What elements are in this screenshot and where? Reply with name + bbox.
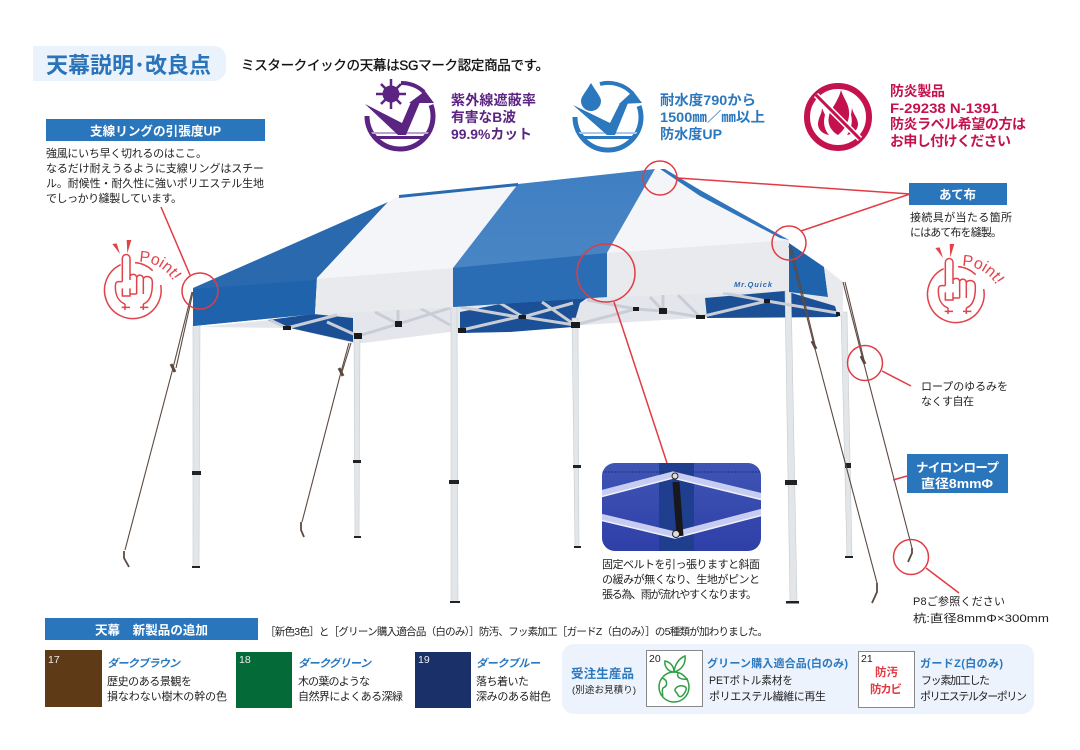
swatch 19 dark blue: 19 — [418, 654, 430, 666]
product 21 icon: antifouling — [858, 652, 914, 708]
ring: fixing belt — [577, 244, 667, 463]
label: stake: 杭:直径8mmΦ×300mm — [913, 612, 1049, 625]
callout: guy ring: でしっかり縫製しています。 — [46, 191, 182, 205]
UV text: 99.9%カット — [451, 126, 532, 142]
ring: stake — [894, 540, 959, 593]
icon: point hand right — [926, 244, 1004, 324]
swatch 17 dark brown — [45, 650, 227, 707]
photo caption: 固定ベルトを引っ張りますと斜面 — [602, 557, 760, 571]
label: rope tensioner: ロープのゆるみを — [921, 380, 1008, 393]
swatch 18 dark green: 18 — [239, 654, 251, 666]
icon: UV protection — [365, 79, 435, 149]
product 20 icon: green globe: 20 — [649, 653, 661, 665]
section heading: new products — [45, 618, 258, 640]
title — [33, 46, 226, 81]
subtitle: ミスタークイックの天幕はSGマーク認定商品です。 — [241, 58, 549, 73]
tent — [124, 169, 912, 604]
product 20 text: ポリエステル繊維に再生 — [709, 689, 826, 703]
flame retardant text — [890, 83, 1026, 149]
callout: corner patch: にはあて布を縫製。 — [910, 225, 1002, 239]
callout: guy ring — [46, 119, 265, 205]
label: rope tensioner — [921, 380, 1008, 408]
callout: nylon rope — [893, 454, 1008, 493]
swatch 19 dark blue — [415, 652, 551, 708]
callout: nylon rope: ナイロンロープ — [916, 461, 999, 475]
label: rope tensioner: なくす自在 — [921, 395, 974, 408]
canopy: right blue edge — [660, 169, 789, 240]
flame retardant text: 防炎製品 — [890, 83, 945, 99]
callout: guy ring: 支線リングの引張度UP — [90, 124, 221, 138]
title: 天幕説明･改良点 — [46, 53, 211, 78]
ring: rope tensioner — [848, 346, 911, 386]
swatch 17 dark brown: 損なわない樹木の幹の色 — [107, 689, 227, 703]
photo caption — [602, 557, 760, 601]
photo caption: の緩みが無くなり、生地がピンと — [602, 572, 760, 586]
icon: point hand left: Point! — [140, 250, 182, 280]
product 21 text: ポリエステルターポリン — [920, 690, 1027, 703]
leg clamps and feet — [192, 460, 853, 604]
product 21 text: ガードZ(白のみ) — [920, 656, 1003, 670]
panel: made to order — [562, 644, 1034, 714]
callout: corner patch: 接続具が当たる箇所 — [910, 210, 1012, 224]
swatch 19 dark blue: 深みのある紺色 — [476, 690, 551, 703]
water resistance text: 耐水度790から — [660, 92, 756, 108]
label: stake — [913, 594, 1049, 625]
UV text: 有害なB波 — [451, 109, 516, 125]
canopy: white right panel — [607, 169, 789, 297]
callout: guy ring: なるだけ耐えうるように支線リングはスチー — [46, 161, 264, 175]
UV text: 紫外線遮蔽率 — [451, 92, 536, 108]
canopy: white panel — [315, 184, 518, 314]
swatch 17 dark brown: 17 — [48, 654, 60, 666]
swatch 19 dark blue: 落ち着いた — [476, 674, 529, 688]
swatch 17 dark brown: 歴史のある景観を — [107, 674, 192, 688]
callout: guy ring: 強風にいち早く切れるのはここ。 — [46, 147, 207, 160]
frame struts — [270, 293, 838, 336]
flame retardant text: お申し付けください — [890, 133, 1011, 149]
callout: corner patch: あて布 — [939, 187, 976, 202]
flame retardant text: 防炎ラベル希望の方は — [890, 116, 1026, 132]
callout: guy ring: ル。耐候性・耐久性に強いポリエステル生地 — [46, 176, 264, 190]
swatch 19 dark blue: ダークブルー — [476, 657, 541, 670]
callout: nylon rope: 直径8mmΦ — [921, 476, 993, 491]
underside fabric — [200, 285, 843, 343]
product 20 text: PETボトル素材を — [709, 673, 793, 687]
product 20 text — [707, 656, 848, 703]
swatch 17 dark brown: ダークブラウン — [107, 657, 181, 670]
product 21 text: フッ素加工した — [921, 674, 990, 687]
product 20 icon: green globe — [646, 650, 702, 706]
logo: Mr.Quick — [734, 280, 773, 289]
canopy: left blue panel — [193, 202, 388, 326]
water resistance text: 1500㎜／㎜以上 — [660, 109, 765, 125]
guy ropes — [124, 246, 912, 603]
canopy: blue centre panel — [453, 169, 655, 307]
ring: corner patch at apex — [643, 161, 910, 195]
new products description: ［新色3色］と［グリーン購入適合品（白のみ）］防汚、フッ素加工［ガードZ（白のみ）］の5種類が加わりました。 — [265, 625, 768, 638]
label: stake: P8ご参照ください — [913, 594, 1005, 608]
swatch 18 dark green: 木の葉のような — [298, 674, 370, 688]
icon: point hand left — [104, 240, 182, 320]
water resistance text: 防水度UP — [660, 126, 722, 142]
UV text — [451, 92, 536, 142]
swatch 18 dark green: 自然界によくある深緑 — [298, 689, 403, 703]
flame retardant text: F-29238 N-1391 — [890, 100, 999, 116]
product 21 icon: antifouling: 防汚 — [875, 665, 898, 679]
made to order heading — [571, 666, 636, 696]
section heading: new products: 天幕 新製品の追加 — [95, 622, 208, 638]
icon: water resistance — [573, 83, 643, 150]
made to order heading: (別途お見積り) — [572, 684, 636, 696]
photo: fixing belt — [600, 463, 763, 551]
icon: point hand right: Point! — [963, 254, 1004, 284]
water resistance text — [660, 92, 765, 142]
ring: guy ring — [161, 207, 218, 309]
product 21 icon: antifouling: 防カビ — [870, 682, 902, 696]
product 21 text — [920, 656, 1027, 703]
swatch 18 dark green — [236, 652, 403, 708]
product 20 text: グリーン購入適合品(白のみ) — [707, 656, 848, 670]
swatch 18 dark green: ダークグリーン — [298, 657, 372, 670]
product 21 icon: antifouling: 21 — [861, 653, 873, 665]
icon: flame retardant — [807, 86, 869, 148]
ring: corner patch at eave — [772, 194, 910, 260]
frame joints — [283, 299, 840, 339]
made to order heading: 受注生産品 — [571, 666, 634, 681]
photo caption: 張る為、雨が流れやすくなります。 — [602, 587, 757, 601]
tent legs — [193, 290, 852, 602]
callout: corner patch — [909, 183, 1012, 239]
